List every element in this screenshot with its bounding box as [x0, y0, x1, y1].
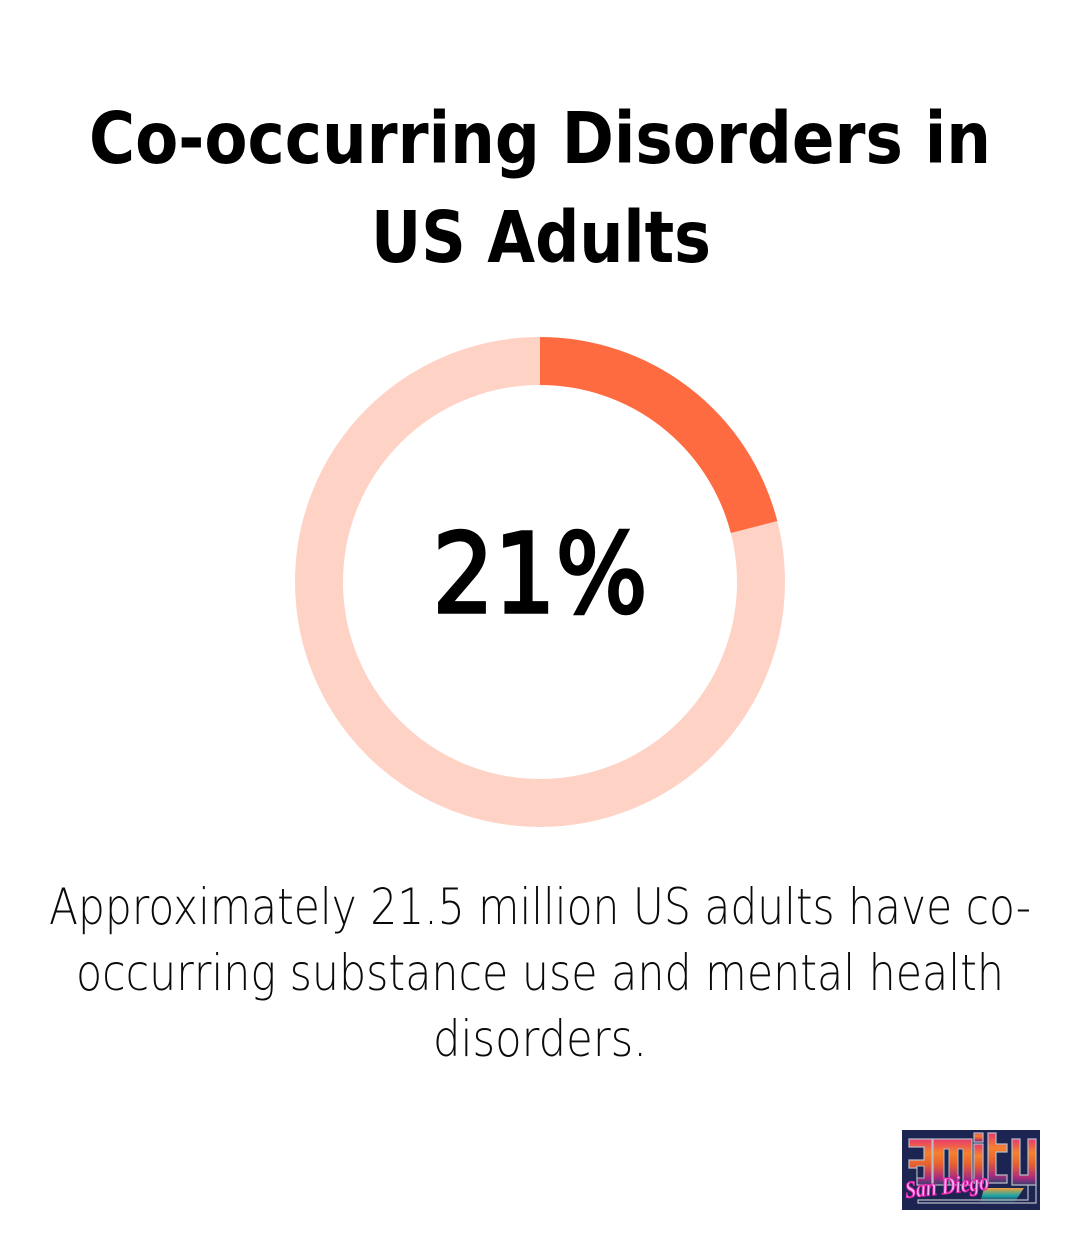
donut chart	[319, 337, 777, 803]
logo letters	[909, 1133, 1036, 1185]
logo beach stripes	[980, 1188, 1024, 1203]
logo y tail outline	[918, 1185, 1036, 1203]
title: Co-occurring Disorders in	[89, 97, 991, 180]
logo letter slots	[917, 1149, 963, 1185]
donut segment: 21%	[540, 337, 777, 533]
description text	[49, 878, 1031, 1068]
donut track	[319, 361, 761, 803]
logo: Amity San Diego	[902, 1130, 1040, 1210]
title	[89, 97, 991, 279]
description text: disorders.	[433, 1010, 647, 1068]
logo background	[902, 1130, 1040, 1210]
logo wordmark: San Diego	[904, 1169, 990, 1204]
center value: 21%	[432, 510, 648, 638]
title: US Adults	[371, 196, 711, 279]
